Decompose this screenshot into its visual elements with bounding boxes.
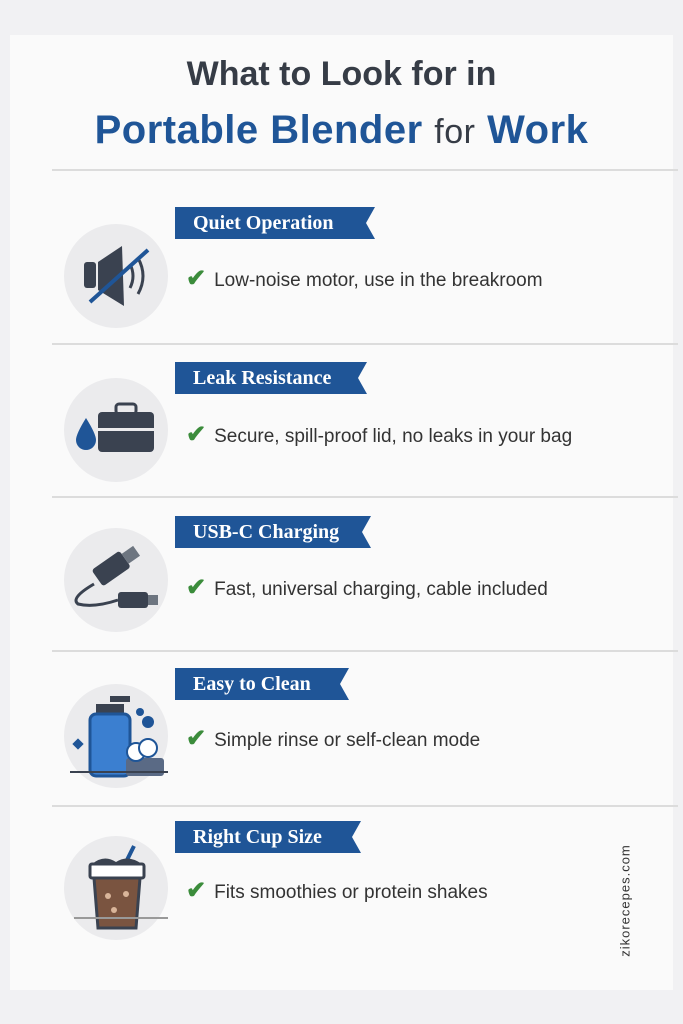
title: What to Look for in [187, 55, 496, 93]
text: leak: ✔ Secure, spill-proof lid, no leaks in your bag [186, 421, 572, 448]
banner: Right Cup Size: Right Cup Size [193, 826, 322, 848]
icon: drop and bag [64, 378, 168, 482]
icon: cup [64, 836, 168, 940]
banner: Leak Resistance: Leak Resistance [193, 367, 331, 389]
icon: usb cable [64, 528, 168, 632]
icon: speaker mute [64, 224, 168, 328]
banner: USB-C Charging [175, 516, 371, 548]
text: quiet: ✔ Low-noise motor, use in the breakroom [186, 265, 543, 292]
banner: Quiet Operation [175, 207, 375, 239]
banner: Easy to Clean [175, 668, 349, 700]
watermark: zikorecepes.com [618, 844, 632, 957]
banner: Easy to Clean: Easy to Clean [193, 673, 311, 695]
icon: bottle and bubbles [64, 684, 168, 788]
banner: Quiet Operation: Quiet Operation [193, 212, 334, 234]
text: clean: ✔ Simple rinse or self-clean mode [186, 725, 480, 752]
subtitle: Portable Blender for Work [95, 108, 588, 152]
banner: Leak Resistance [175, 362, 367, 394]
banner: Right Cup Size [175, 821, 361, 853]
text: usb: ✔ Fast, universal charging, cable included [186, 574, 548, 601]
banner: USB-C Charging: USB-C Charging [193, 521, 339, 543]
text: cup: ✔ Fits smoothies or protein shakes [186, 877, 488, 904]
